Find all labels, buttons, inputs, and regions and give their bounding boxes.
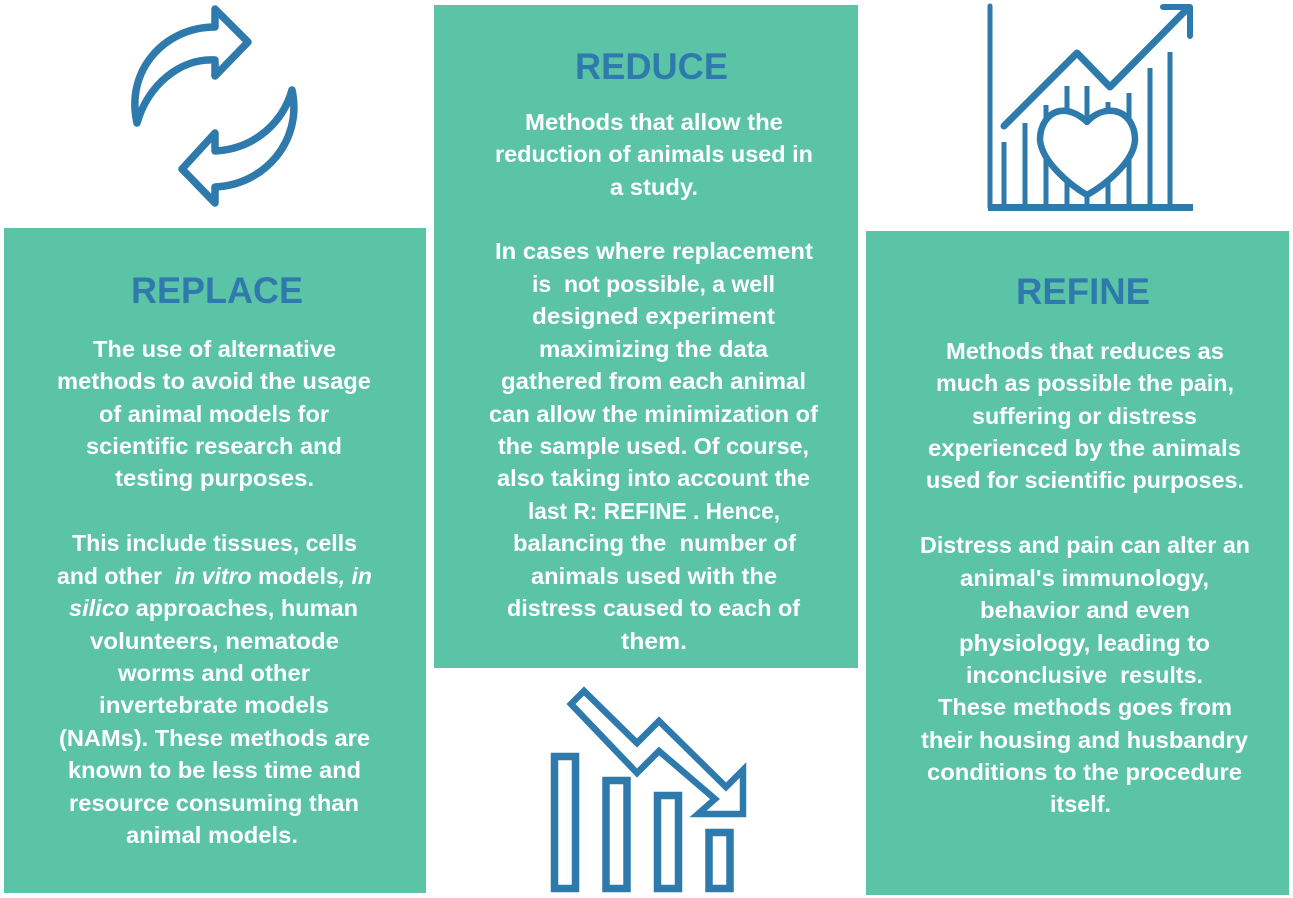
text block: refine description: These methods goes from [938,694,1232,720]
text block: replace description: invertebrate models [99,692,329,718]
text block: reduce description: designed experiment [532,303,775,329]
text block: refine description: inconclusive results. [966,662,1203,688]
text block: replace description: methods to avoid the usage [57,368,371,394]
text block: refine description [920,338,1250,817]
text block: refine description: conditions to the procedure [927,759,1242,785]
text block: refine description: Distress and pain can alter an [920,532,1250,558]
text block: reduce description: gathered from each animal [501,368,806,394]
text block: reduce description: In cases where replacement [495,238,813,264]
text block: reduce description: reduction of animals used in [495,141,813,167]
text block: refine description: physiology, leading to [959,630,1210,656]
icon: falling bar chart [554,691,743,888]
text block: refine description: much as possible the pain, [936,370,1234,396]
text block: replace description: and other in vitro models, in [57,563,372,589]
text block: replace description: This include tissues, cells [72,530,357,556]
text block: reduce description: also taking into account the [497,465,810,491]
text block: refine description: itself. [1050,791,1111,817]
text block: refine description: animal's immunology, [960,565,1209,591]
text block: replace description: silico approaches, human [69,595,358,621]
text block: replace description: animal models. [126,822,298,848]
text block: replace description: scientific research and [86,433,342,459]
panel: replace [4,228,426,893]
text block: replace description: volunteers, nematode [90,628,339,654]
icon: circular replace arrows [135,9,294,203]
panel: reduce [434,5,858,668]
text block: reduce description: the sample used. Of course, [498,433,809,459]
heading: replace: REPLACE [131,270,303,311]
text block: reduce description: animals used with the [531,563,777,589]
text block: reduce description [489,109,818,654]
text block: reduce description: maximizing the data [539,336,768,362]
text block: replace description: known to be less time and [68,757,361,783]
text block: replace description: (NAMs). These methods are [59,725,370,751]
icon: rising chart with heart [988,6,1193,208]
text block: replace description: of animal models for [99,401,329,427]
text block: replace description: testing purposes. [115,465,314,491]
text block: reduce description: last R: REFINE . Hence, [528,498,780,524]
text block: reduce description: a study. [610,174,698,200]
heading: refine: REFINE [1016,271,1150,312]
heading: reduce: REDUCE [575,46,728,87]
text block: refine description: suffering or distress [972,403,1197,429]
text block: reduce description: them. [621,628,687,654]
text block: reduce description: balancing the number of [513,530,796,556]
text block: reduce description: is not possible, a well [532,271,775,297]
text block: reduce description: Methods that allow the [525,109,783,135]
text block: refine description: their housing and husbandry [921,727,1248,753]
text block: replace description: The use of alternative [93,336,336,362]
text block: refine description: Methods that reduces as [946,338,1224,364]
text block: reduce description: distress caused to each of [507,595,800,621]
text block: refine description: used for scientific purposes. [926,467,1244,493]
text block: replace description [57,336,372,848]
text block: reduce description: can allow the minimization of [489,401,818,427]
text block: replace description: resource consuming than [69,790,359,816]
panel: refine [866,231,1289,895]
text block: refine description: behavior and even [980,597,1190,623]
text block: replace description: worms and other [117,660,310,686]
text block: refine description: experienced by the animals [928,435,1241,461]
